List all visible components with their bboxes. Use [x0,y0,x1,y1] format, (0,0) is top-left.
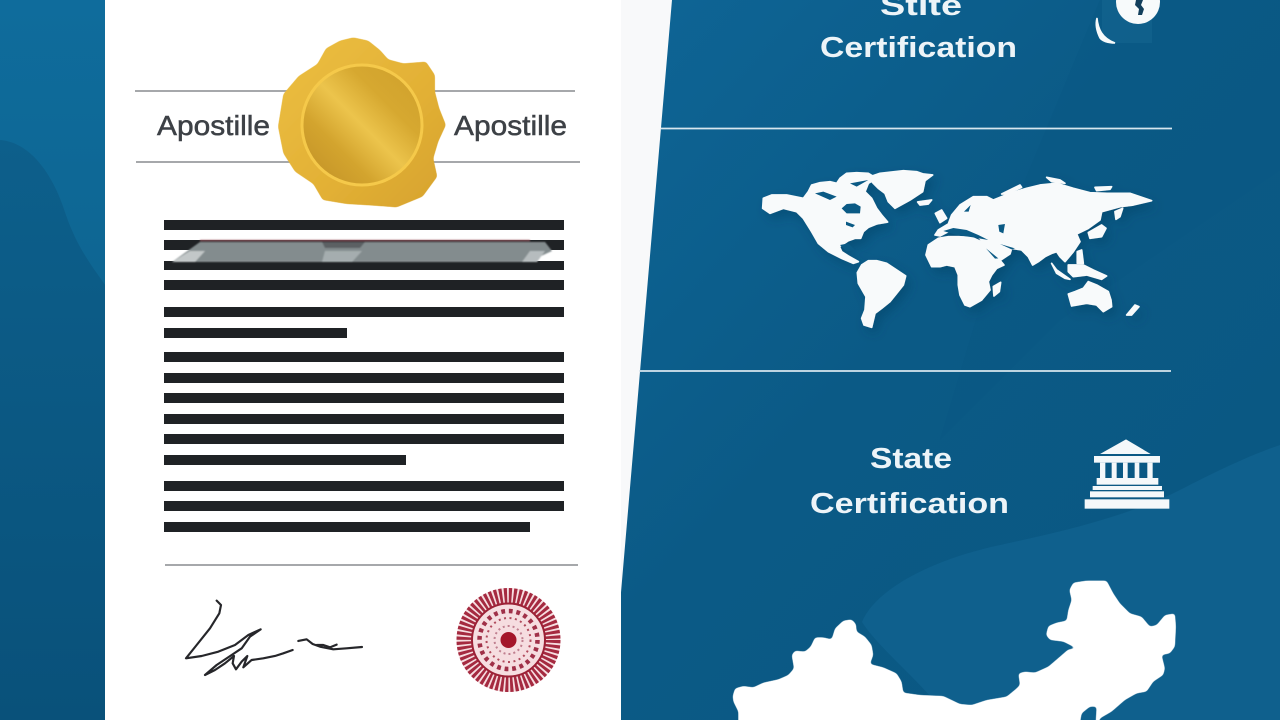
icon: globe badge cropped at top [1096,0,1160,43]
apostille label left: Apostille [157,110,270,141]
document text lines [164,220,564,532]
seal header rules [135,91,580,162]
heading: state certification [810,443,1009,520]
panel: apostille document [105,0,621,720]
inland seas [815,180,1015,259]
apostille label right: Apostille [454,110,567,141]
right blue background [610,0,1280,720]
smeared scan band across lines [172,240,552,262]
icon: gold wax seal [278,37,446,207]
left blue background [0,0,110,720]
icon: red official stamp [456,588,560,692]
heading: top state certification: Certification [820,32,1017,64]
white wedge beside document [600,0,672,720]
continents [763,171,1152,327]
world map [763,171,1152,327]
icon: government building [1085,439,1169,509]
divider lines [639,128,1172,371]
signature rule [165,564,578,566]
heading: state certification: Certification [810,488,1009,520]
heading: top state certification [820,0,1017,64]
signature [186,601,362,675]
heading: state certification: State [870,443,952,475]
china map [733,581,1176,720]
